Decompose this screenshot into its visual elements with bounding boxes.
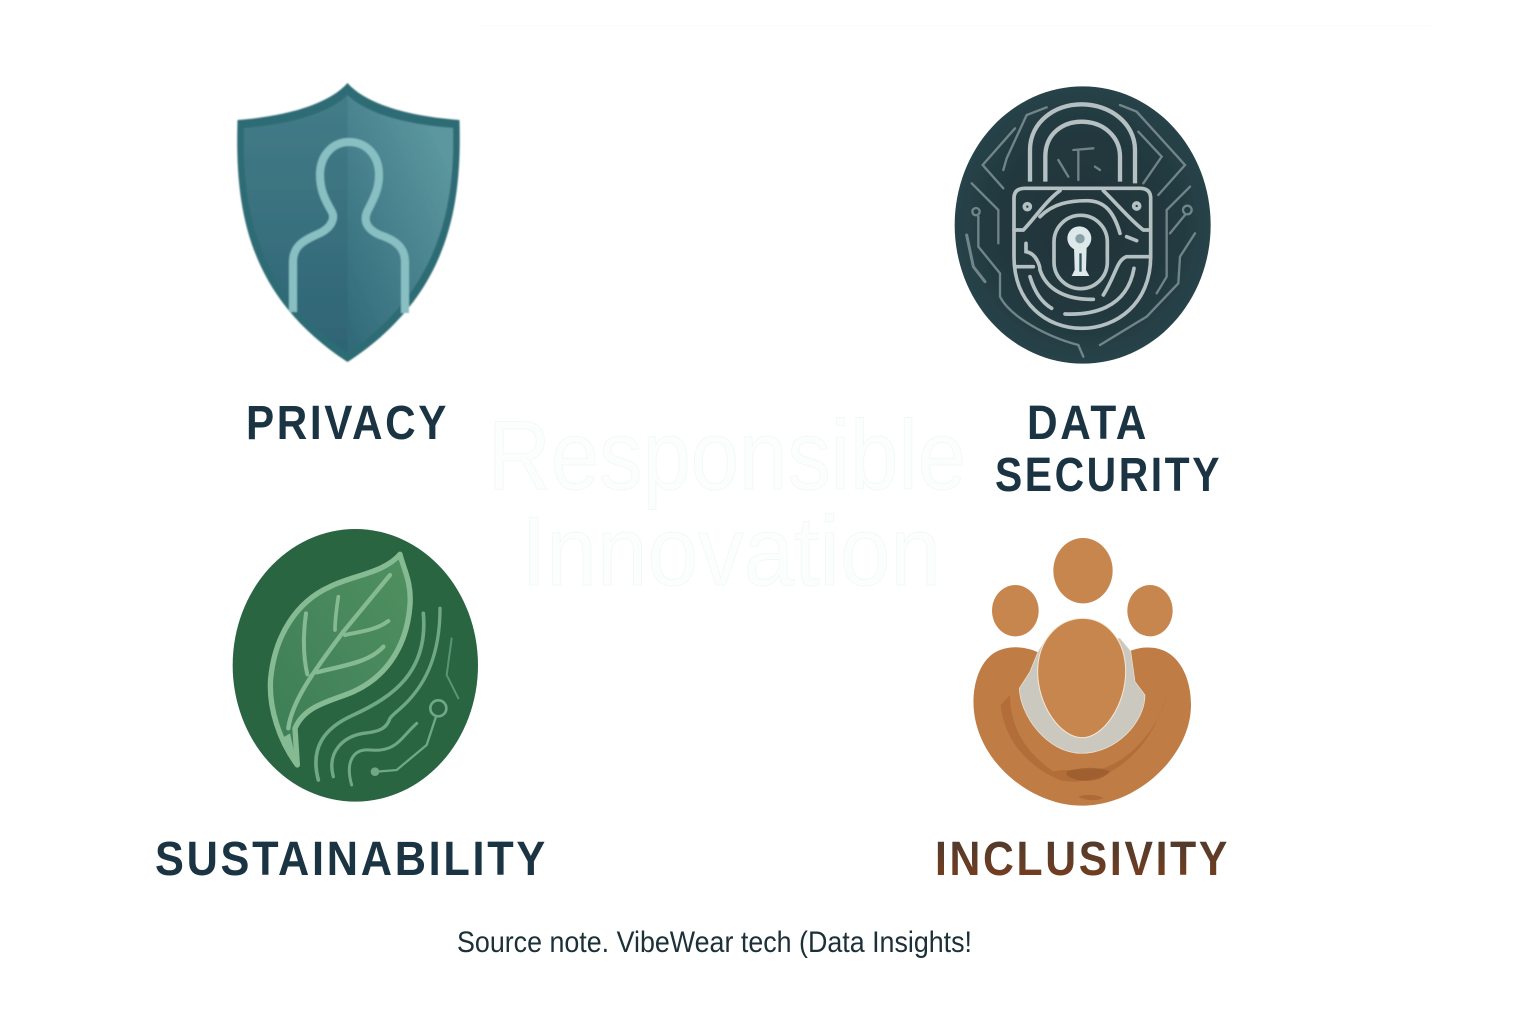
title: Responsible Innovation watermark: Innovation xyxy=(521,496,941,606)
circuit curves xyxy=(316,608,458,785)
label: SUSTAINABILITY: SUSTAINABILITY xyxy=(155,833,548,886)
title: Responsible Innovation watermark xyxy=(488,400,966,606)
icon: data security padlock xyxy=(955,86,1211,364)
label: DATA SECURITY: DATA xyxy=(1027,397,1149,450)
icon: privacy shield xyxy=(237,83,460,362)
label: PRIVACY: PRIVACY xyxy=(246,397,449,450)
right head xyxy=(1127,585,1173,636)
top head xyxy=(1053,538,1113,603)
centre head xyxy=(1038,618,1126,738)
icon: inclusivity people xyxy=(973,538,1191,806)
shackle xyxy=(1030,104,1135,183)
label: INCLUSIVITY: INCLUSIVITY xyxy=(935,833,1230,886)
icon: sustainability leaf xyxy=(233,529,478,802)
lock body and maze lines xyxy=(1014,188,1151,328)
source note: Source note. VibeWear tech (Data Insights! xyxy=(457,926,972,959)
title: Responsible Innovation watermark: Responsible xyxy=(488,400,966,510)
leaf veins xyxy=(288,575,390,728)
label: DATA SECURITY xyxy=(995,397,1222,502)
left head xyxy=(992,585,1039,636)
white collar xyxy=(1019,638,1145,753)
leaf xyxy=(270,554,410,765)
embracing body xyxy=(973,647,1191,806)
keyhole xyxy=(1067,226,1091,276)
person outline xyxy=(293,142,405,313)
label: DATA SECURITY: SECURITY xyxy=(995,449,1222,502)
circuit traces xyxy=(967,105,1195,357)
